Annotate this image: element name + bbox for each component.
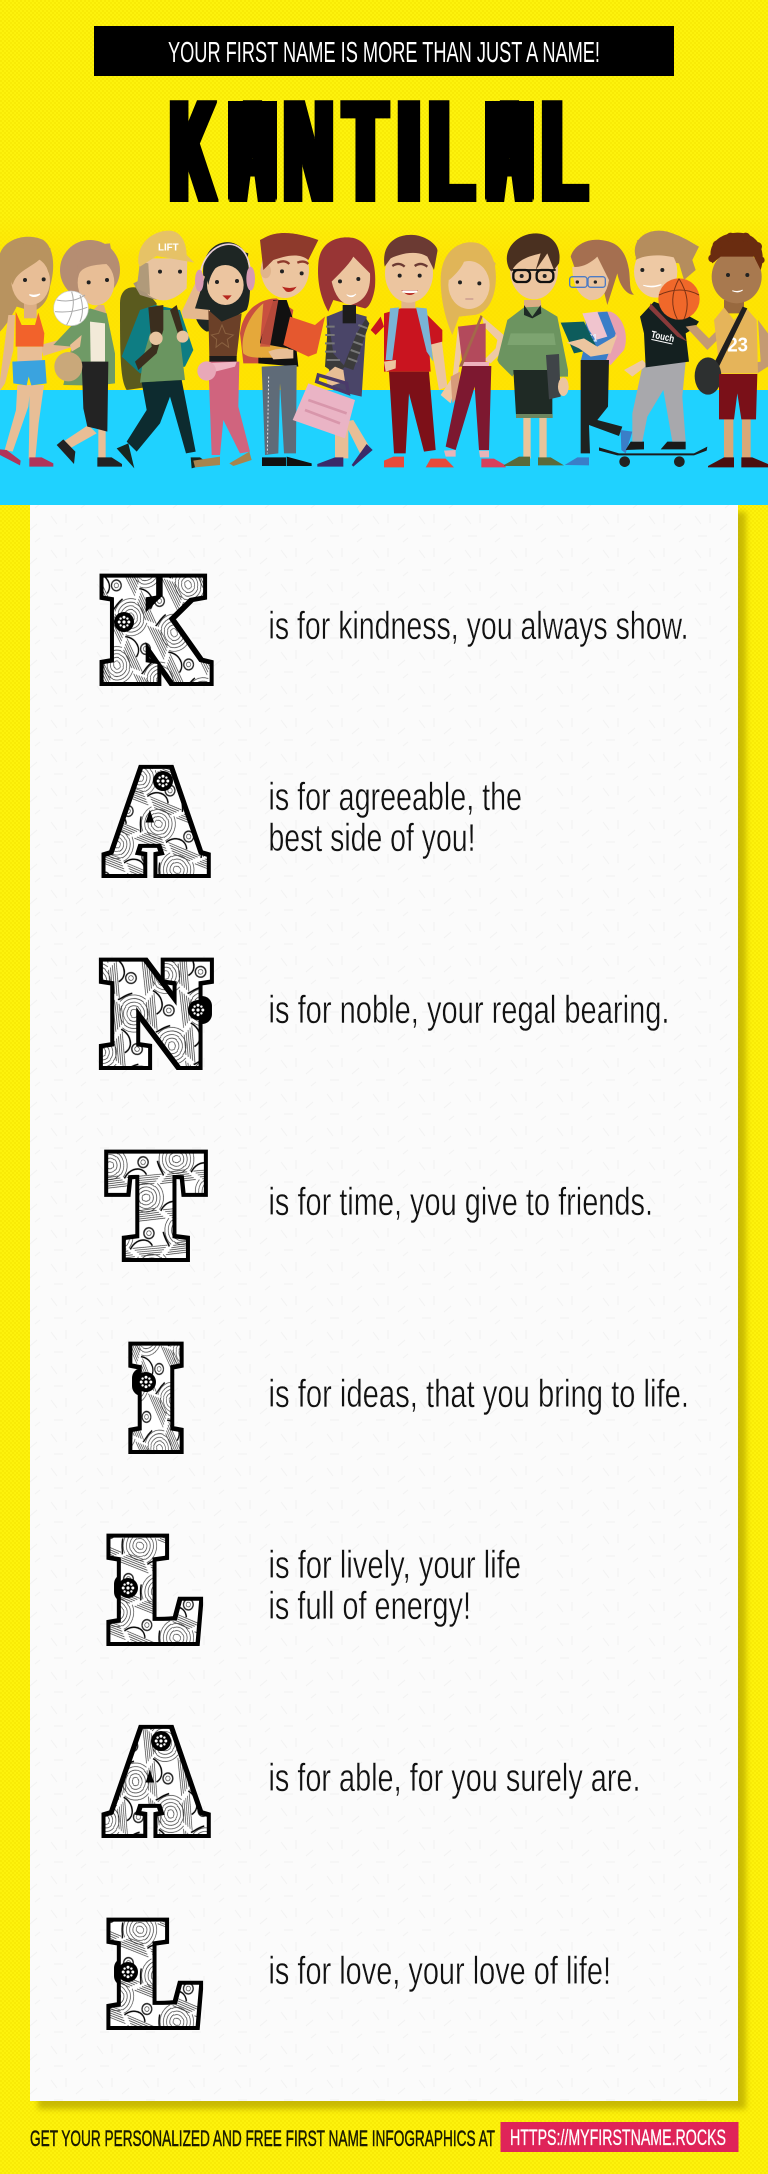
student 12: boy in yellow tank top xyxy=(695,233,768,467)
letter I: I xyxy=(134,1321,178,1474)
letter A: A xyxy=(111,744,201,897)
student 3: boy with backpack and cap: LIFT xyxy=(158,243,179,254)
title: L xyxy=(429,71,474,233)
title: A xyxy=(233,71,272,233)
illustration: group of students, left half xyxy=(0,231,375,468)
title: T xyxy=(345,69,386,232)
student 1: girl in orange top xyxy=(0,237,82,467)
panel: name meanings xyxy=(30,505,738,2101)
letter A second: A xyxy=(111,1704,201,1857)
student 7: boy in red shirt xyxy=(371,235,454,467)
student 4: girl with headphones xyxy=(182,242,255,467)
title xyxy=(171,69,587,233)
title: A xyxy=(490,71,529,233)
student 11: boy on skateboard with basketball: Touch xyxy=(650,330,675,345)
student 9: boy with glasses xyxy=(497,233,569,466)
illustration: group of students, right half xyxy=(371,231,768,467)
student 6: girl with pink bag xyxy=(293,237,375,467)
top banner xyxy=(94,26,674,76)
row: L: is full of energy! xyxy=(268,1585,471,1628)
title: I xyxy=(397,71,421,233)
blue floor band xyxy=(0,390,768,505)
student 10: girl with tablet xyxy=(561,240,634,465)
row: A second: is for able, for you surely are. xyxy=(268,1757,640,1800)
row: L second xyxy=(115,1897,611,2049)
student 2: girl with volleyball xyxy=(53,240,122,467)
row: K xyxy=(108,553,689,705)
letter L second: L xyxy=(115,1897,197,2049)
row: A: best side of you! xyxy=(268,817,476,860)
row: I xyxy=(134,1321,689,1474)
row: L xyxy=(115,1513,521,1665)
title: L xyxy=(542,71,587,233)
letter T: T xyxy=(113,1128,199,1281)
student 10: girl with tablet: 61 xyxy=(588,333,597,345)
student 3: boy with backpack and cap xyxy=(117,231,208,468)
warmer yellow behind the students xyxy=(0,215,768,390)
letter K: K xyxy=(108,553,204,705)
row: L: is for lively, your life xyxy=(268,1544,521,1587)
row: L second: is for love, your love of life! xyxy=(268,1950,611,1993)
row: A xyxy=(111,744,522,897)
title: N xyxy=(284,70,333,232)
row: N xyxy=(107,936,670,1089)
row: A: is for agreeable, the xyxy=(268,776,522,819)
row: A second xyxy=(111,1704,640,1857)
title: K xyxy=(171,70,214,232)
footer call to action: GET YOUR PERSONALIZED AND FREE FIRST NAME INFOGRAPHICS AT xyxy=(30,2126,495,2151)
student 8: blonde girl xyxy=(441,242,506,467)
student 11: boy on skateboard with basketball xyxy=(599,231,727,467)
student 5: boy with red book xyxy=(240,233,325,466)
panel shadow xyxy=(38,512,746,2109)
row: T xyxy=(113,1128,653,1281)
letter N: N xyxy=(107,936,205,1089)
student 12: boy in yellow tank top: 23 xyxy=(727,335,748,357)
letter L: L xyxy=(115,1513,197,1665)
